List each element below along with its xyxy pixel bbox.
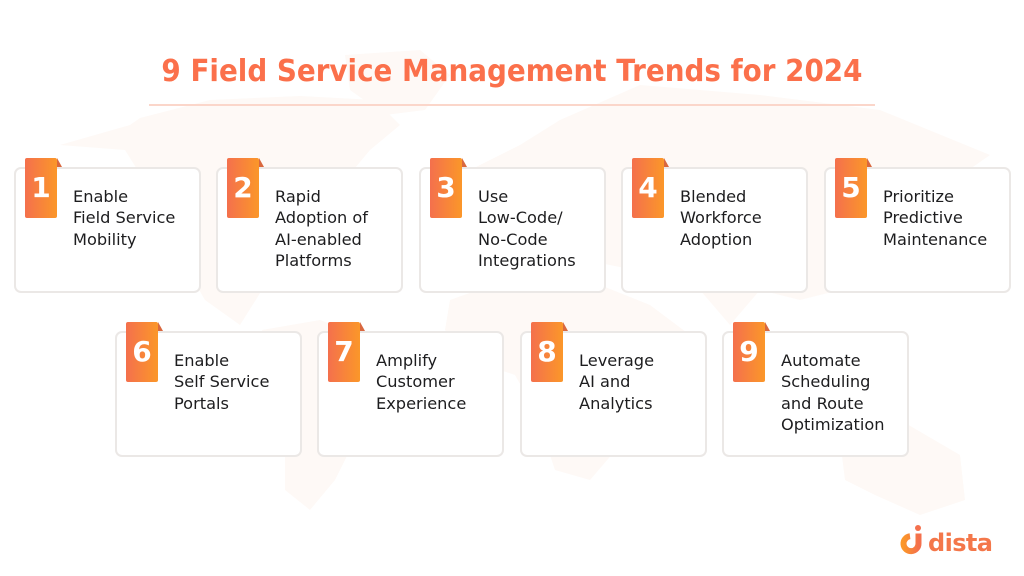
card 3 text <box>478 187 576 270</box>
card 6 text: Portals <box>174 394 229 413</box>
card 9 <box>722 331 909 457</box>
card 9 text: and Route <box>781 394 864 413</box>
number badge 9: 9 <box>739 335 759 368</box>
title: 9 Field Service Management Trends for 2024 <box>161 54 862 89</box>
card 5 text: Maintenance <box>883 230 987 249</box>
card 3 <box>419 167 606 293</box>
card 8 text: Analytics <box>579 394 653 413</box>
card 5 text: Prioritize <box>883 187 954 206</box>
number badge 6 <box>126 322 158 382</box>
logo: dista <box>900 525 992 556</box>
logo mark <box>904 525 921 551</box>
card 4 text <box>680 187 762 249</box>
card 1 text <box>73 187 175 249</box>
number badge 3 <box>430 158 462 218</box>
card 9 text: Optimization <box>781 415 885 434</box>
card 7 text: Customer <box>376 372 455 391</box>
card 2 <box>216 167 403 293</box>
card 4 text: Blended <box>680 187 746 206</box>
card 5 text <box>883 187 987 249</box>
title underline <box>149 104 875 106</box>
card 8 text <box>579 351 654 413</box>
number badge 8: 8 <box>537 335 557 368</box>
card 9 text: Scheduling <box>781 372 870 391</box>
card 4 text: Workforce <box>680 208 762 227</box>
card 2 text: Adoption of <box>275 208 368 227</box>
card 8 text: Leverage <box>579 351 654 370</box>
card 6 text: Enable <box>174 351 229 370</box>
card 2 text <box>275 187 368 270</box>
number badge 7 <box>328 322 360 382</box>
number badge 7: 7 <box>334 335 354 368</box>
number badge 8 <box>531 322 563 382</box>
card 1 text: Field Service <box>73 208 175 227</box>
card 7 text: Amplify <box>376 351 437 370</box>
number badge 2: 2 <box>233 171 253 204</box>
card 6 <box>115 331 302 457</box>
card 6 text: Self Service <box>174 372 269 391</box>
card 2 text: AI-enabled <box>275 230 362 249</box>
number badge 5 <box>835 158 867 218</box>
card 7 text: Experience <box>376 394 466 413</box>
card 5 text: Predictive <box>883 208 963 227</box>
card 8 text: AI and <box>579 372 630 391</box>
card 9 text <box>781 351 885 434</box>
number badge 9 <box>733 322 765 382</box>
number badge 4: 4 <box>638 171 658 204</box>
card 3 text: Low-Code/ <box>478 208 563 227</box>
card 3 text: No-Code <box>478 230 548 249</box>
card 2 text: Rapid <box>275 187 321 206</box>
number badge 1 <box>25 158 57 218</box>
card 5 <box>824 167 1011 293</box>
card 6 text <box>174 351 269 413</box>
number badge 3: 3 <box>436 171 456 204</box>
card 7 text <box>376 351 466 413</box>
number badge 2 <box>227 158 259 218</box>
card 9 text: Automate <box>781 351 861 370</box>
card 2 text: Platforms <box>275 251 352 270</box>
card 3 text: Use <box>478 187 508 206</box>
card 1 text: Enable <box>73 187 128 206</box>
number badge 4 <box>632 158 664 218</box>
card 8 <box>520 331 707 457</box>
card 4 <box>621 167 808 293</box>
number badge 6: 6 <box>132 335 152 368</box>
number badge 1: 1 <box>31 171 51 204</box>
card 3 text: Integrations <box>478 251 576 270</box>
card 7 <box>317 331 504 457</box>
card 4 text: Adoption <box>680 230 752 249</box>
card 1 <box>14 167 201 293</box>
number badge 5: 5 <box>841 171 861 204</box>
card 1 text: Mobility <box>73 230 137 249</box>
